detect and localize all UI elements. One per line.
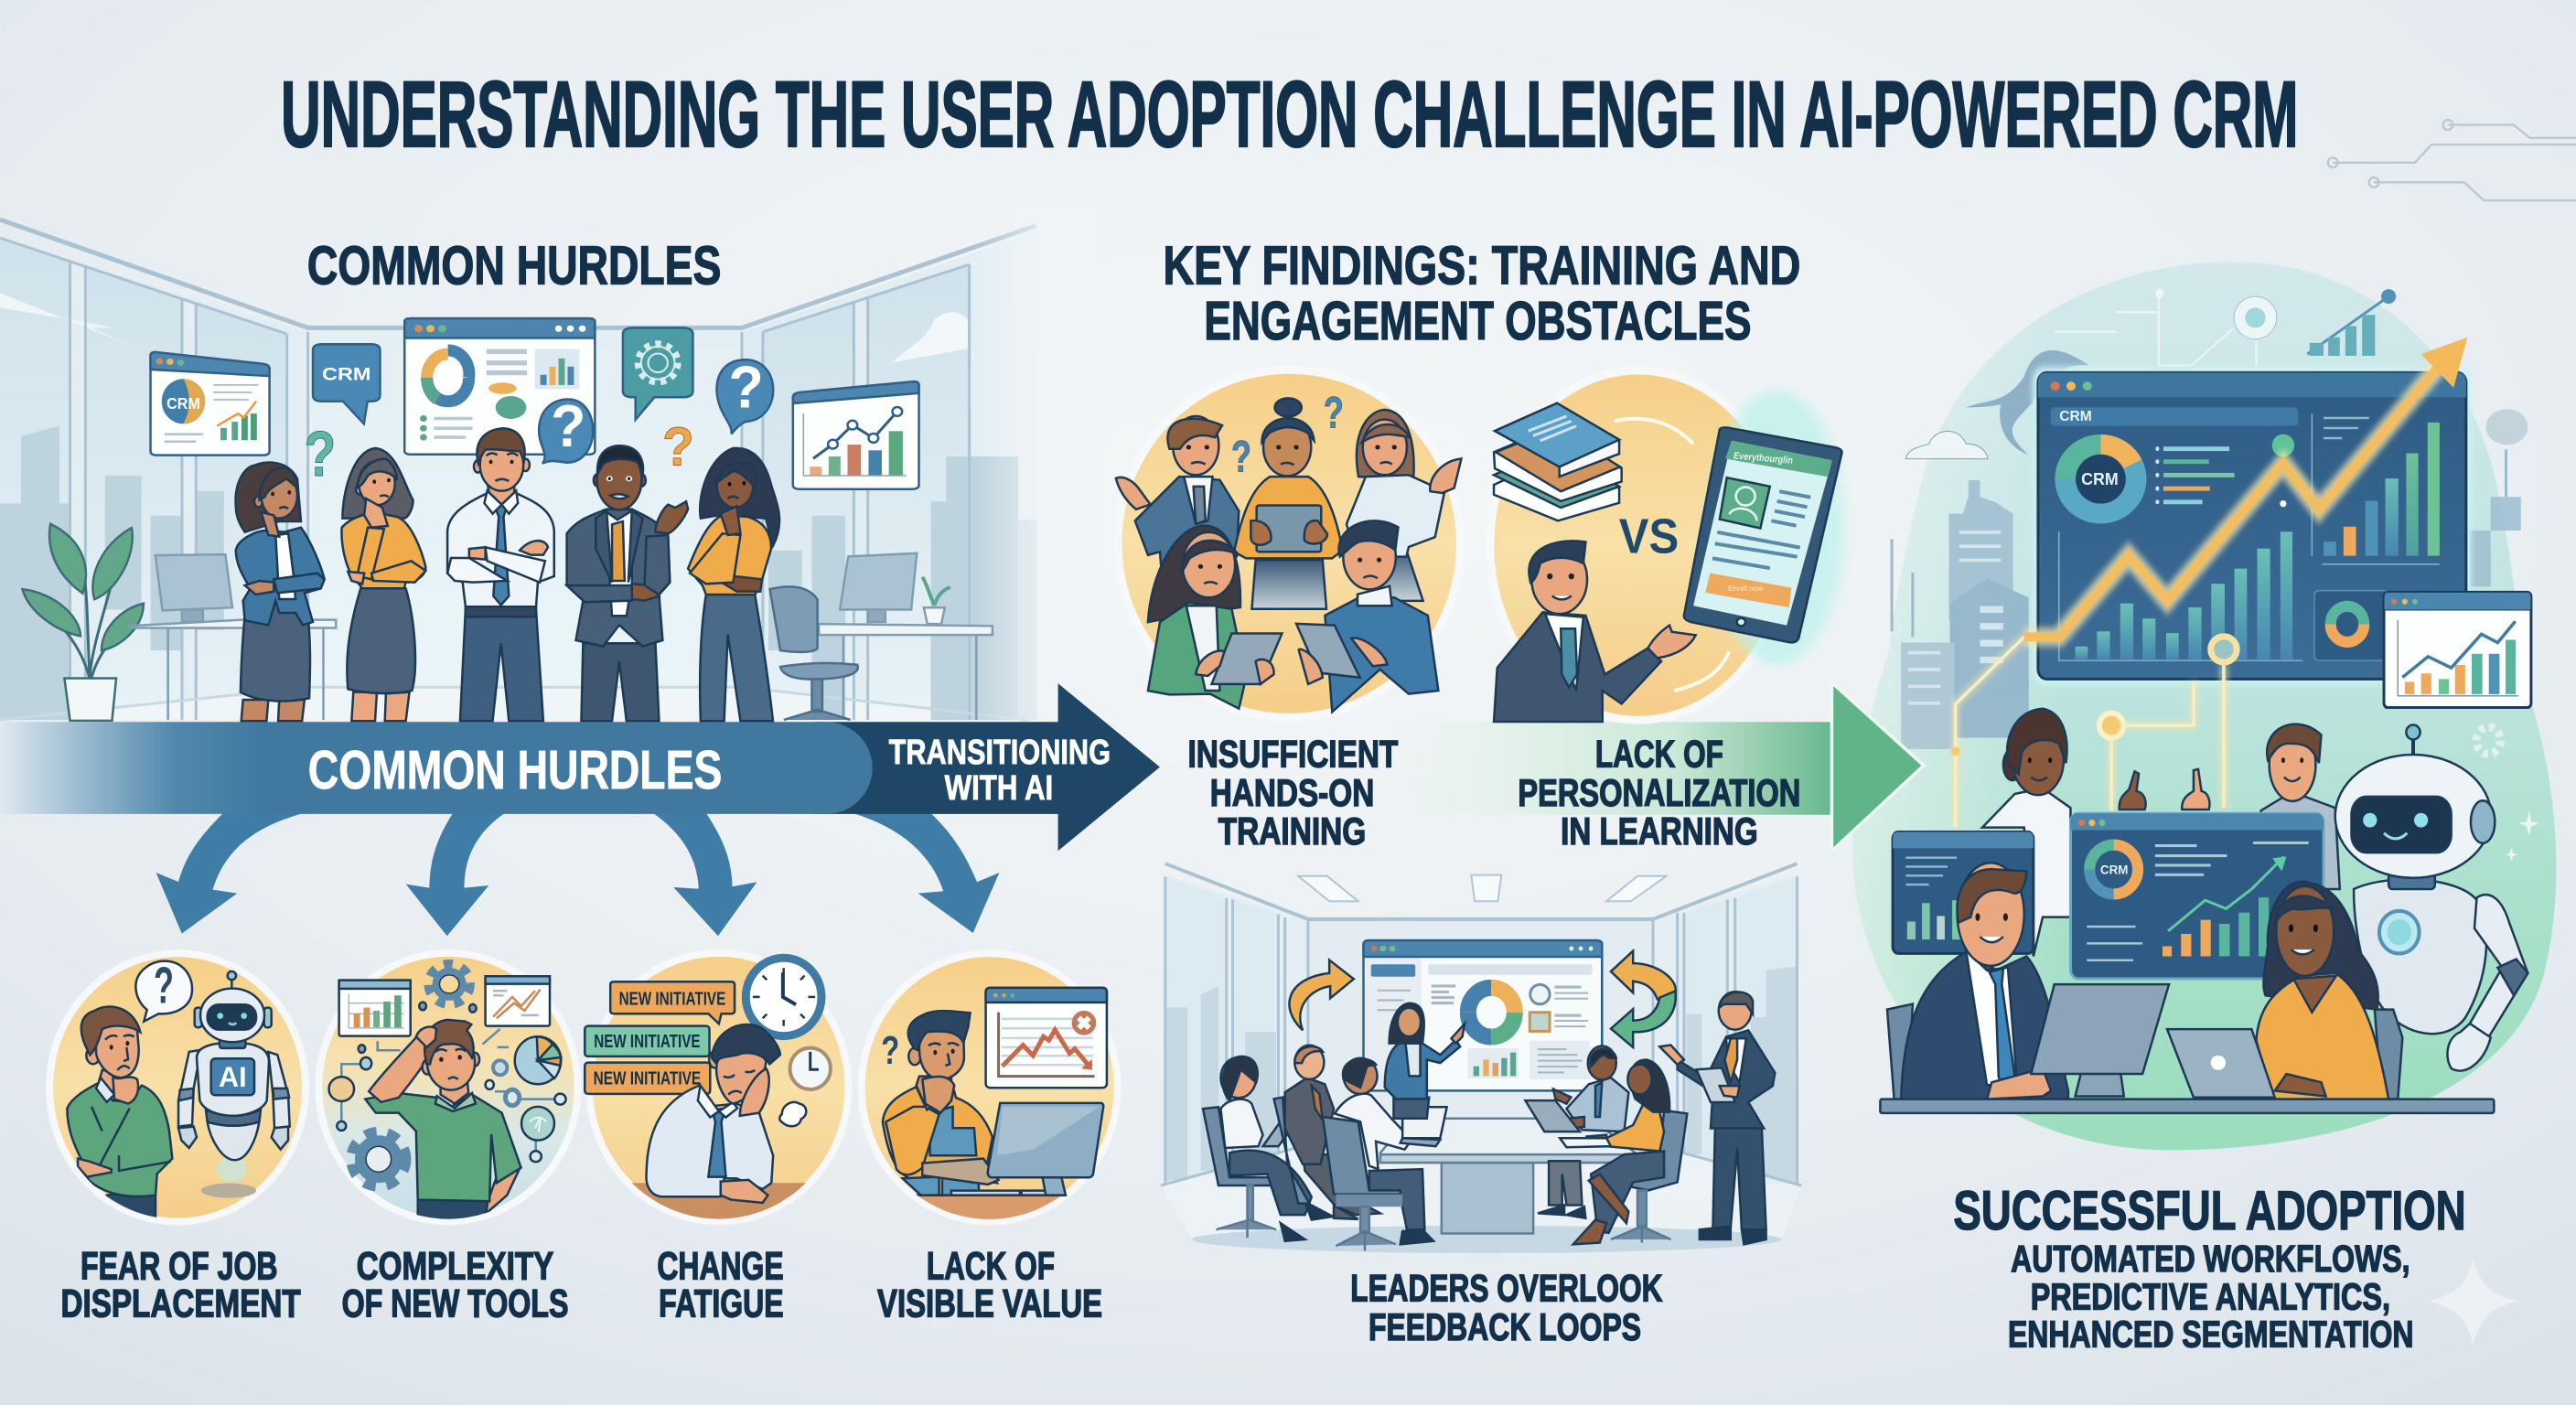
panel: conference room scene — [1161, 863, 1801, 1253]
presenting man — [1494, 541, 1696, 722]
seated woman left — [1203, 1056, 1333, 1241]
floating CRM screen left — [151, 352, 270, 456]
gear speech bubble — [623, 327, 692, 420]
person 5: woman with curly hair — [688, 448, 779, 721]
personalized tablet: Everythourglin — [1733, 450, 1794, 466]
CRM speech bubble: CRM — [322, 364, 371, 384]
question marks: ? — [1324, 388, 1344, 437]
personalization circle — [1490, 370, 1844, 722]
desk — [915, 1194, 1060, 1219]
labels under hurdle circles: FEAR OF JOB — [80, 1244, 278, 1287]
label: leaders overlook feedback loops: LEADERS OVERLOOK — [1350, 1267, 1663, 1309]
orange question mark: ? — [662, 416, 694, 477]
question marks: ? — [1231, 432, 1251, 481]
panel: hurdles circles — [49, 953, 1118, 1223]
question bubble centre: ? — [551, 393, 585, 459]
question speech bubble — [135, 958, 192, 1022]
central dashboard window — [404, 318, 595, 455]
sparkle icon — [2428, 1257, 2517, 1346]
puzzled man — [883, 1011, 999, 1196]
heading: key findings: ENGAGEMENT OBSTACLES — [1204, 290, 1751, 351]
person 3: man with crossed arms — [447, 428, 554, 721]
left desk and monitor — [130, 554, 336, 720]
cloud and top decor — [1905, 288, 2528, 459]
woman in white shirt — [1347, 410, 1461, 601]
main CRM dashboard: CRM — [2081, 469, 2119, 488]
pie chart — [515, 1036, 561, 1084]
hurdle circle: lack of visible value — [862, 953, 1118, 1223]
desktop monitor — [2031, 984, 2169, 1097]
sigh puff — [779, 1102, 806, 1126]
green backdrop blob — [1853, 262, 2556, 1150]
laptop — [2167, 1029, 2275, 1098]
hovering AI robot: AI — [219, 1060, 247, 1093]
bar chart left — [2076, 531, 2292, 660]
label: leaders overlook feedback loops: FEEDBACK LOOPS — [1368, 1306, 1641, 1348]
dark transition arrow: TRANSITIONING — [889, 733, 1111, 771]
question bubble centre — [539, 393, 593, 464]
man thinking in green sweater — [67, 1007, 172, 1219]
floating chart screen right — [793, 381, 919, 489]
CRM donut — [2066, 445, 2136, 512]
back person: woman — [1982, 709, 2070, 956]
person 2: woman in orange blouse — [341, 448, 425, 721]
room backdrop — [1161, 863, 1801, 1239]
seated woman right — [1560, 1060, 1687, 1244]
bar chart right — [2324, 423, 2440, 556]
robot assistant — [2335, 725, 2539, 1071]
seated man back view — [1323, 1058, 1447, 1250]
labels: training findings: IN LEARNING — [1561, 810, 1758, 853]
labels under hurdle circles: VISIBLE VALUE — [877, 1282, 1102, 1325]
back person: man — [2261, 724, 2340, 889]
labels: training findings: HANDS-ON — [1210, 772, 1374, 814]
heading: key findings — [1164, 235, 1800, 351]
question bubble right: ? — [728, 355, 764, 421]
woman in green jacket — [1148, 526, 1282, 709]
new initiative tags: NEW INITIATIVE — [619, 988, 725, 1009]
small chart window — [2384, 592, 2531, 708]
blue common hurdles band — [0, 722, 873, 814]
labels: training findings: TRAINING — [1218, 810, 1366, 853]
successful adoption text block — [1953, 1180, 2466, 1356]
wall clock — [746, 958, 821, 1036]
labels: training findings: INSUFFICIENT — [1187, 734, 1398, 776]
teal question mark: ? — [305, 419, 336, 489]
right desk, monitor and chair — [770, 553, 993, 720]
labels under hurdle circles: LACK OF — [927, 1244, 1055, 1287]
mini donut panel — [2314, 591, 2388, 660]
label: leaders overlook feedback loops — [1350, 1267, 1663, 1348]
front woman in orange — [2256, 882, 2402, 1099]
hurdle circle: fear of job displacement — [49, 953, 306, 1222]
network nodes — [329, 1003, 566, 1162]
pointing hands — [2120, 769, 2209, 810]
panel: insufficient training and personalization circles — [1116, 370, 1844, 722]
panel: common hurdles office scene — [0, 201, 1098, 721]
hovering AI robot — [178, 971, 290, 1198]
circuit traces — [1951, 637, 2237, 828]
standing man — [1659, 992, 1775, 1244]
main CRM dashboard: CRM — [2059, 409, 2092, 424]
versus label: VS — [1619, 509, 1679, 563]
orange and green loop arrow — [1611, 951, 1676, 1047]
presenter woman — [1385, 1003, 1465, 1119]
top gear — [431, 966, 468, 1003]
falling chart window — [986, 988, 1107, 1088]
curved arrows from band to hurdles — [156, 810, 999, 936]
hurdle circles: complexity of new tools and change fatigue — [318, 953, 848, 1223]
new initiative tags: NEW INITIATIVE — [594, 1067, 701, 1089]
person 4: man in dark suit — [567, 445, 688, 721]
chart window right — [486, 976, 550, 1026]
green arrow band — [1380, 682, 1924, 851]
dark transition arrow: WITH AI — [945, 768, 1053, 807]
city skyline — [1892, 449, 2521, 749]
five office people and question marks — [236, 416, 779, 721]
orange feedback arrow — [1289, 960, 1354, 1030]
CRM speech bubble — [313, 344, 380, 424]
personalized tablet: Enroll now — [1728, 585, 1763, 593]
personalized tablet — [1684, 427, 1841, 642]
dark transition arrow — [813, 683, 1160, 851]
table — [1380, 1119, 1636, 1234]
desk — [1880, 1099, 2494, 1113]
floor shadow — [1192, 1226, 1782, 1253]
successful adoption text block: ENHANCED SEGMENTATION — [2008, 1314, 2414, 1356]
change fatigue circle — [585, 953, 848, 1223]
decorative white arrows — [1615, 419, 1729, 691]
question mark: ? — [881, 1029, 899, 1073]
labels: training findings: PERSONALIZATION — [1518, 772, 1800, 814]
decorative circuit lines: top right — [2328, 120, 2576, 200]
labels under hurdle circles: CHANGE — [657, 1244, 784, 1287]
left mini screen — [1893, 832, 2034, 953]
chart window left — [339, 981, 411, 1036]
labels under hurdle circles — [60, 1244, 1102, 1325]
woman with bun holding tablet — [1234, 398, 1343, 609]
front man in suit — [1887, 863, 2068, 1099]
man in suit — [1116, 416, 1239, 583]
office backdrop — [0, 201, 1098, 720]
arrow to lack of visible value — [843, 810, 999, 933]
arrow to complexity of new tools — [406, 810, 509, 936]
centre mini screen — [2070, 813, 2324, 979]
stacked books — [1494, 403, 1622, 520]
centre mini screen: CRM — [2100, 862, 2128, 877]
plant — [23, 524, 144, 721]
arrow to fear of job displacement — [156, 810, 315, 934]
labels under hurdle circles: DISPLACEMENT — [60, 1282, 301, 1325]
main CRM dashboard — [2038, 372, 2466, 679]
seated man right — [1525, 1046, 1628, 1218]
arrow to change fatigue — [649, 810, 757, 936]
successful adoption text block: AUTOMATED WORKFLOWS, — [2011, 1238, 2410, 1280]
complexity circle — [318, 953, 578, 1221]
successful adoption text block: PREDICTIVE ANALYTICS, — [2031, 1275, 2390, 1317]
heading: common hurdles: COMMON HURDLES — [307, 235, 721, 296]
tired man at desk — [631, 1024, 808, 1223]
small clock — [790, 1048, 831, 1089]
seated man tan suit — [1274, 1046, 1380, 1219]
labels: training findings — [1187, 734, 1800, 853]
labels under hurdle circles: FATIGUE — [659, 1282, 784, 1325]
list rows — [2155, 417, 2369, 507]
training circle — [1116, 370, 1461, 717]
floating CRM screen left: CRM — [166, 394, 200, 413]
presentation screen — [1363, 940, 1602, 1090]
question marks — [1231, 388, 1344, 481]
panel: successful adoption scene — [1853, 262, 2556, 1150]
new initiative tags — [585, 981, 735, 1094]
labels: training findings: LACK OF — [1595, 734, 1723, 776]
desktop monitor — [951, 1103, 1103, 1196]
question bubble right — [716, 355, 773, 434]
heading: key findings: KEY FINDINGS: TRAINING AND — [1164, 235, 1800, 296]
man scratching head — [365, 1020, 521, 1219]
question speech bubble: ? — [154, 958, 174, 1015]
bottom gear — [353, 1134, 403, 1185]
labels under hurdle circles: OF NEW TOOLS — [342, 1282, 568, 1325]
man in blue sweater — [1296, 520, 1438, 712]
person 1: woman in blue jacket — [236, 463, 325, 721]
blue common hurdles band: COMMON HURDLES — [308, 739, 722, 800]
rising gold arrow — [2024, 338, 2467, 637]
new initiative tags: NEW INITIATIVE — [594, 1030, 701, 1052]
labels under hurdle circles: COMPLEXITY — [357, 1244, 553, 1287]
glow behind dashboard — [2033, 367, 2471, 685]
